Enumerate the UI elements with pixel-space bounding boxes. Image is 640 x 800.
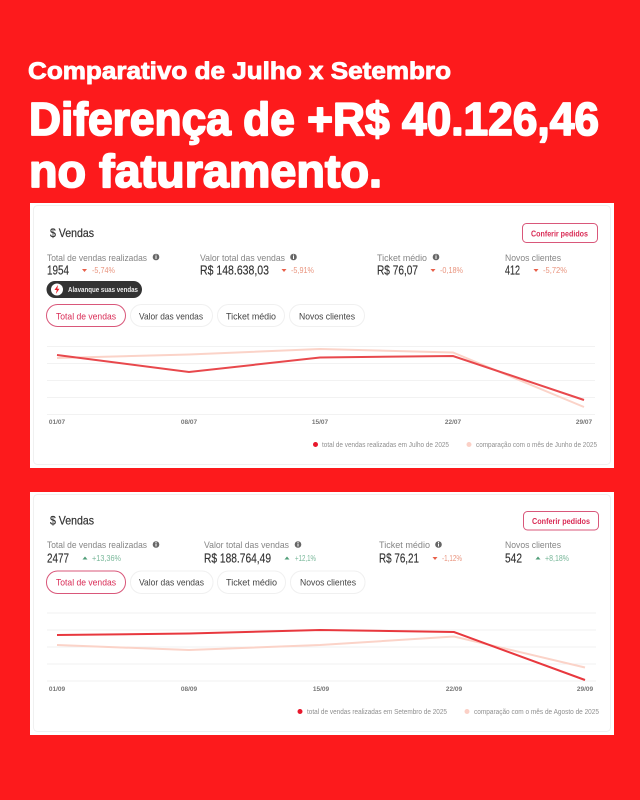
button: check orders	[524, 512, 598, 530]
panel: September sales	[30, 492, 614, 735]
legend: September chart: comparação com o mês de Agosto de 2025	[474, 709, 599, 716]
legend: July chart	[313, 442, 597, 449]
legend: July chart: comparação com o mês de Junho de 2025	[476, 442, 597, 449]
line chart: July vs June: 15/07	[312, 419, 329, 426]
metric: total sales	[47, 540, 159, 566]
tabs: chart metric selector: Novos clientes	[299, 312, 355, 322]
panel heading: September sales: $ Vendas	[50, 514, 94, 528]
metric: average ticket: Ticket médio	[379, 540, 430, 551]
metric: total sales value: Valor total das vendas	[200, 253, 285, 264]
metric: new customers: +8,18%	[545, 554, 569, 563]
tabs: chart metric selector	[46, 571, 365, 594]
tabs: chart metric selector: Ticket médio	[226, 312, 276, 322]
badge: boost your sales: Alavanque suas vendas	[68, 285, 138, 294]
headline: revenue difference: Diferença de +R$ 40.126,46	[29, 93, 599, 145]
button: check orders	[522, 224, 598, 242]
headline: revenue difference	[29, 93, 599, 197]
metric: total sales value	[204, 540, 316, 566]
metric: total sales value: R$ 148.638,03	[200, 264, 269, 278]
metric: average ticket: -0,18%	[440, 266, 463, 275]
line chart: July vs June: 01/07	[49, 419, 66, 426]
metric: average ticket	[377, 253, 463, 278]
legend: September chart: total de vendas realizadas em Setembro de 2025	[307, 709, 447, 716]
metric: total sales: Total de vendas realizadas	[47, 253, 147, 264]
tabs: chart metric selector	[46, 304, 364, 326]
tabs: chart metric selector: Valor das vendas	[139, 312, 203, 322]
metric: total sales: Total de vendas realizadas	[47, 540, 147, 551]
tabs: chart metric selector: Valor das vendas	[139, 578, 204, 588]
panel: July sales	[30, 203, 614, 468]
line chart: September vs August: 01/09	[49, 686, 66, 693]
button: check orders: Conferir pedidos	[531, 228, 588, 238]
line chart: September vs August: 29/09	[577, 686, 594, 693]
metric: total sales: -5,74%	[92, 266, 115, 275]
panel heading: July sales: $ Vendas	[50, 226, 94, 240]
tabs: chart metric selector: Ticket médio	[226, 578, 277, 588]
metric: new customers: Novos clientes	[505, 540, 561, 551]
title: comparison subtitle: Comparativo de Julho x Setembro	[28, 58, 451, 85]
line chart: July vs June	[47, 346, 595, 426]
metric: new customers	[505, 253, 567, 278]
metric: average ticket: Ticket médio	[377, 253, 427, 264]
line chart: September vs August: 08/09	[181, 686, 198, 693]
metric: average ticket: R$ 76,21	[379, 552, 419, 566]
metric: total sales value: R$ 188.764,49	[204, 552, 271, 566]
headline: revenue difference: no faturamento.	[29, 145, 382, 197]
badge: boost your sales	[46, 281, 142, 298]
metric: new customers	[505, 540, 569, 566]
line chart: September vs August: 22/09	[446, 686, 463, 693]
metric: average ticket: -1,12%	[442, 554, 462, 563]
line chart: July vs June: 08/07	[181, 419, 198, 426]
line chart: July vs June: 29/07	[576, 419, 593, 426]
legend: July chart: total de vendas realizadas em Julho de 2025	[322, 442, 449, 449]
line chart: September vs August: 15/09	[313, 686, 330, 693]
metric: total sales value	[200, 253, 314, 278]
button: check orders: Conferir pedidos	[532, 516, 590, 526]
metric: new customers: 412	[505, 264, 520, 278]
tabs: chart metric selector: Total de vendas	[56, 312, 116, 322]
tabs: chart metric selector: Total de vendas	[56, 578, 116, 588]
line chart: July vs June: 22/07	[445, 419, 462, 426]
line chart: September vs August	[47, 613, 596, 693]
metric: average ticket: R$ 76,07	[377, 264, 418, 278]
metric: total sales value: Valor total das vendas	[204, 540, 289, 551]
metric: new customers: Novos clientes	[505, 253, 561, 264]
tabs: chart metric selector: Novos clientes	[300, 578, 356, 588]
metric: total sales value: -5,91%	[291, 266, 314, 275]
metric: total sales: +13,36%	[92, 554, 121, 563]
metric: average ticket	[379, 540, 462, 566]
metric: total sales: 1954	[47, 264, 69, 278]
metric: total sales value: +12,1%	[295, 554, 316, 563]
metric: new customers: -5,72%	[543, 266, 567, 275]
metric: new customers: 542	[505, 552, 522, 566]
metric: total sales: 2477	[47, 552, 69, 566]
legend: September chart	[298, 709, 599, 716]
metric: total sales	[47, 253, 159, 278]
